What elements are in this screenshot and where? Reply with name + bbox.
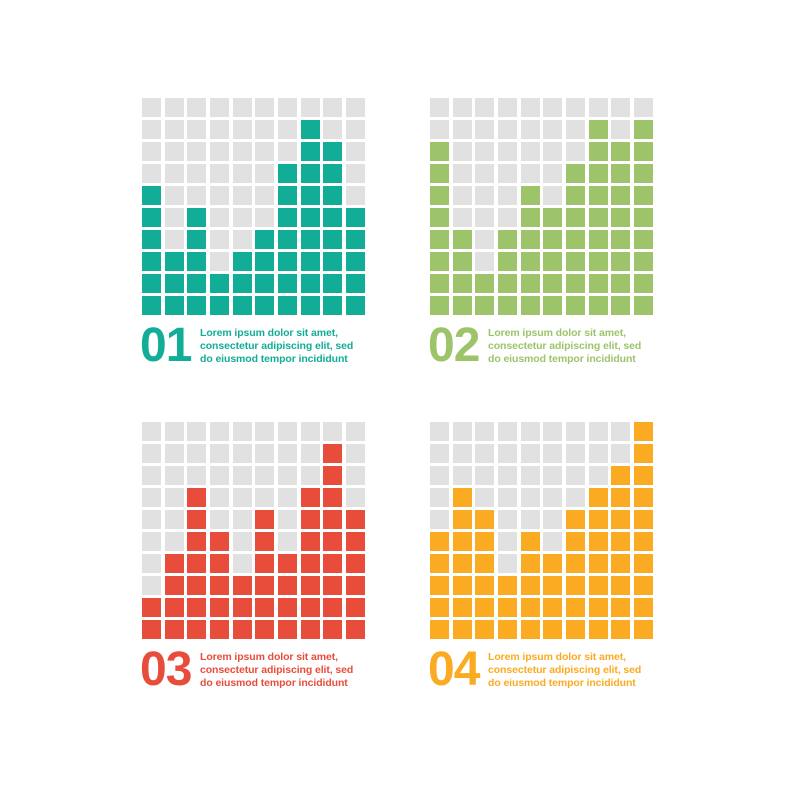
- number 02: 02: [428, 319, 479, 372]
- number 01: 01: [140, 319, 191, 372]
- text block 01: Lorem ipsum dolor sit amet,: [200, 327, 338, 339]
- panel: 04 orange: [428, 422, 653, 696]
- chart: green grid bars: [430, 98, 653, 315]
- chart: red grid bars: [142, 422, 365, 639]
- chart: orange grid bars: [430, 422, 653, 639]
- text block 03: consectetur adipiscing elit, sed: [200, 664, 353, 676]
- text block 04: Lorem ipsum dolor sit amet,: [488, 651, 626, 663]
- panel: 01 teal: [140, 98, 365, 372]
- text block 03: [200, 651, 353, 689]
- text block 02: consectetur adipiscing elit, sed: [488, 340, 641, 352]
- text block 02: Lorem ipsum dolor sit amet,: [488, 327, 626, 339]
- text block 02: do eiusmod tempor incididunt: [488, 353, 636, 365]
- text block 03: Lorem ipsum dolor sit amet,: [200, 651, 338, 663]
- text block 01: do eiusmod tempor incididunt: [200, 353, 348, 365]
- panel: 03 red: [140, 422, 365, 696]
- chart: teal grid bars: [142, 98, 365, 315]
- text block 04: do eiusmod tempor incididunt: [488, 677, 636, 689]
- text block 04: [488, 651, 641, 689]
- text block 01: [200, 327, 353, 365]
- text block 03: do eiusmod tempor incididunt: [200, 677, 348, 689]
- text block 01: consectetur adipiscing elit, sed: [200, 340, 353, 352]
- number 03: 03: [140, 643, 191, 696]
- panel: 02 green: [428, 98, 653, 372]
- number 04: 04: [428, 643, 479, 696]
- text block 04: consectetur adipiscing elit, sed: [488, 664, 641, 676]
- text block 02: [488, 327, 641, 365]
